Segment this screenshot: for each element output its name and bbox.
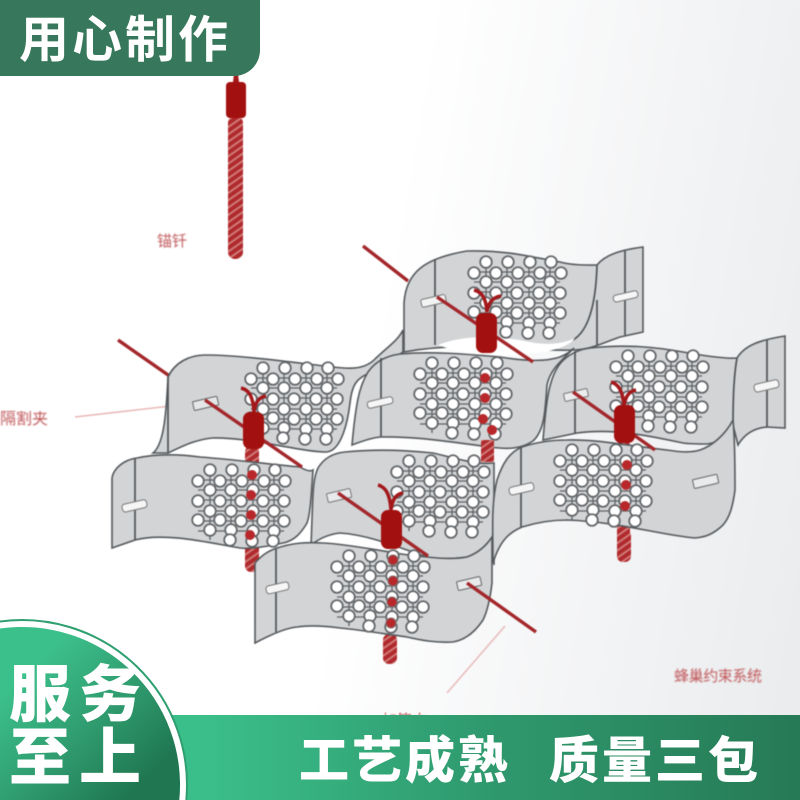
cell: mid-center panel: [352, 348, 574, 448]
nails: front diagonals: [205, 297, 655, 632]
leader line: clip label: [75, 404, 188, 417]
banner: top left: [0, 0, 260, 76]
badge text: 服务: [9, 661, 149, 730]
red dots through mid-center holes: [478, 373, 497, 435]
slogan: guarantee: 质量三包: [549, 733, 761, 789]
badge: circular disc with ring: [0, 619, 188, 800]
leader line: bottom label: [447, 626, 505, 693]
anchor head: mid-right: [611, 382, 636, 443]
stray nail: top panel: [363, 246, 408, 281]
cell: mid-right panel: [543, 336, 785, 445]
stray nail: mid-left panel: [118, 340, 171, 377]
banner title: 用心制作: [19, 12, 231, 68]
label: system: 蜂巢约束系统: [674, 668, 762, 685]
anchor rods behind lower cells: [245, 440, 630, 572]
anchor head: lower-center: [378, 485, 403, 549]
anchor stub: lower-right rod: [617, 530, 631, 562]
cell: lower-center panel: [311, 450, 494, 565]
badge text: 至上: [9, 724, 149, 793]
red dots: lower-right rod: [620, 460, 632, 511]
badge text: [9, 661, 149, 793]
slogan: craft: 工艺成熟: [299, 733, 511, 789]
anchor rod (standalone): [226, 74, 246, 259]
red dots: front rod: [386, 555, 398, 628]
cell: front panel: [255, 537, 492, 643]
label: anchor rod: 锚钎: [157, 233, 187, 250]
cell: top panel: [404, 247, 643, 355]
cell: mid-left panel: [153, 330, 403, 453]
anchor head: mid-left: [241, 388, 266, 449]
cell: lower-left panel: [112, 455, 313, 548]
label: clip: 隔割夹: [0, 411, 48, 428]
bottom bar: [0, 715, 800, 800]
anchor head: top: [474, 290, 501, 353]
red dots: lower-left rod: [245, 470, 257, 540]
cell: lower-right panel: [493, 420, 735, 563]
anchor stub: front rod: [383, 634, 397, 664]
